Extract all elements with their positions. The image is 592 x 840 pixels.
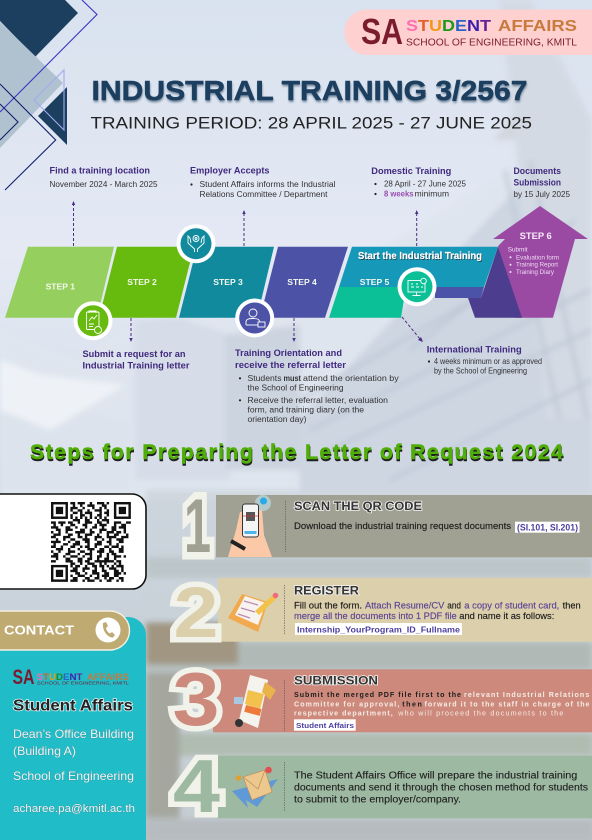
text: documents submission: [514, 166, 571, 199]
digit 2: 2: [174, 574, 218, 653]
section heading: Steps for Preparing the Letter of Request 2024: [30, 440, 563, 464]
text: domestic training: [371, 166, 467, 198]
icon: document and envelope: [234, 675, 276, 728]
step 1: [5, 247, 114, 318]
text: employer accepts: Employer Accepts: [190, 166, 270, 176]
card text: and name it as follows:: [459, 611, 554, 621]
card text: and: [447, 600, 461, 610]
card text: Fill out the form.: [294, 600, 362, 610]
arrow: dashed connectors: [72, 201, 423, 342]
text: domestic training: 28 April - 27 June 2025: [384, 180, 467, 188]
text: training orientation: [235, 348, 399, 424]
step 6 arrow: Training Report: [516, 262, 558, 269]
step 1: STEP 1: [46, 282, 75, 292]
small logo: SA: [12, 666, 34, 689]
panel: step 1 scan the QR code: [184, 484, 592, 569]
highlighted file name: Internship_YourProgram_ID_Fullname: [297, 624, 460, 634]
contact name: Student Affairs: [13, 698, 133, 715]
step 6 arrow: Evaluation form: [516, 254, 559, 261]
text: international training: International Training: [427, 345, 522, 356]
text: training orientation: receive the referral letter: [235, 360, 346, 371]
contact details: [13, 727, 135, 815]
text: find a training location: November 2024 - March 2025: [50, 180, 158, 189]
step 6 arrow: Training Diary: [516, 269, 555, 276]
text: submit a request: Industrial Training letter: [82, 360, 190, 372]
text: training orientation: attend the orientation by: [303, 374, 399, 383]
panel: step 2 register: [174, 574, 592, 653]
text: documents submission: by 15 July 2025: [514, 190, 571, 199]
panel: step 4 delivery: [173, 744, 592, 828]
text: submit a request: [82, 349, 190, 372]
section heading: Steps for Preparing the Letter of Request 2024: [30, 442, 564, 466]
text: international training: 4 weeks minimum or as approved: [434, 357, 542, 366]
panel: contact: [0, 611, 146, 840]
card heading: SUBMISSION: [294, 676, 378, 688]
icon: clipboard and pencil: [228, 593, 278, 632]
contact details: (Building A): [13, 744, 76, 758]
card text: Submit the merged PDF file first to the: [294, 691, 461, 699]
card text: Committee for approval,: [294, 700, 399, 708]
text: training orientation: Students: [248, 374, 282, 383]
logo pill: Student Affairs: AFFAIRS: [498, 18, 577, 35]
small logo: STUDENT: [36, 672, 83, 682]
card text: The Student Affairs Office will prepare the industrial training: [294, 771, 577, 782]
training period subtitle: TRAINING PERIOD: 28 APRIL 2025 - 27 JUNE 2025: [90, 114, 532, 132]
text: domestic training: minimum: [415, 190, 449, 198]
text: submit a request: Submit a request for an: [82, 349, 186, 360]
text: documents submission: Documents: [514, 166, 561, 177]
highlighted recipient: Student Affairs: [296, 721, 354, 730]
step 6 arrow: STEP 6: [520, 230, 552, 241]
text: domestic training: Domestic Training: [371, 166, 451, 177]
panel: step 3 submission: [172, 657, 592, 741]
card text: [294, 600, 581, 621]
contact pill with phone icon: [0, 611, 129, 650]
card text: merge all the documents into 1 PDF file: [294, 611, 457, 621]
icon: clipboard badge: [74, 301, 112, 340]
text: training orientation: orientation day): [248, 415, 307, 424]
step 6 arrow: [493, 206, 588, 318]
step 4: STEP 4: [287, 277, 317, 287]
card text: [294, 771, 588, 806]
step 5: [329, 247, 522, 318]
card text: forward it to the staff in charge of the: [424, 700, 590, 708]
decorative corner diamonds: [0, 0, 97, 190]
card text: who will proceed the documents to the: [397, 710, 563, 718]
text: training orientation: the School of Engineering: [248, 384, 344, 392]
card text: Attach Resume/CV: [365, 600, 445, 610]
card text: documents and send it through the chosen method for students: [294, 783, 588, 794]
title: INDUSTRIAL TRAINING 3/2567: [92, 75, 528, 106]
timeline of six steps: [5, 201, 588, 342]
digit 4: 4: [173, 744, 220, 828]
logo pill: Student Affairs: SA: [361, 11, 403, 52]
card text: Download the industrial training request documents: [294, 521, 511, 531]
step 2: [99, 247, 194, 318]
highlighted document codes: (SI.101, SI.201): [517, 522, 578, 532]
small logo: AFFAIRS: [87, 672, 129, 682]
icon: monitor badge: [398, 267, 436, 306]
text: training orientation: form, and training diary (on the: [248, 406, 364, 414]
step 3: STEP 3: [213, 277, 243, 287]
text: employer accepts: Student Affairs informs the Industrial: [200, 180, 336, 189]
text: international training: [427, 345, 542, 376]
card text: a copy of student card,: [464, 600, 559, 610]
step 4: [260, 247, 348, 318]
card text: respective department,: [294, 710, 393, 718]
text: training orientation: Receive the referral letter, evaluation: [248, 396, 388, 405]
card text: to submit to the employer/company.: [294, 795, 461, 806]
icon: envelope on paper plane: [232, 767, 278, 808]
text: find a training location: [50, 166, 158, 189]
step 3: [179, 247, 274, 318]
card text: then: [563, 600, 581, 610]
text: domestic training: 8 weeks: [384, 190, 414, 198]
step 5: Start the Industrial Training: [359, 252, 483, 263]
text: training orientation: Training Orientation and: [235, 348, 342, 359]
card text: [294, 691, 590, 718]
text: international training: by the School of Engineering: [434, 366, 527, 376]
step 5: STEP 5: [360, 277, 389, 287]
contact details: School of Engineering: [13, 769, 134, 783]
contact pill with phone icon: CONTACT: [4, 624, 74, 638]
text: employer accepts: [190, 166, 336, 199]
small logo: [12, 666, 129, 689]
card heading: REGISTER: [294, 586, 360, 598]
digit 1: 1: [184, 484, 211, 569]
contact details: Dean’s Office Building: [13, 727, 134, 741]
step 6 arrow: Submit: [508, 246, 528, 254]
QR code card: [0, 494, 146, 589]
text: documents submission: Submission: [514, 178, 561, 188]
text: training orientation: must: [284, 374, 301, 383]
logo pill: Student Affairs: STUDENT: [406, 18, 492, 35]
text: find a training location: Find a training location: [50, 166, 150, 176]
logo pill: Student Affairs: [344, 10, 592, 55]
digit 3: 3: [172, 657, 220, 741]
logo pill: Student Affairs: SCHOOL OF ENGINEERING, KMITL: [406, 38, 577, 48]
icon: hands with gear badge: [176, 224, 216, 263]
title: INDUSTRIAL TRAINING 3/2567: [92, 77, 528, 108]
contact details: acharee.pa@kmitl.ac.th: [13, 803, 135, 815]
card heading: SCAN THE QR CODE: [294, 501, 422, 513]
step 2: STEP 2: [127, 277, 157, 287]
step 5: Start the Industrial Training: [358, 251, 482, 262]
card text: relevant Industrial Relations: [464, 691, 589, 699]
icon: person with briefcase badge: [235, 298, 274, 338]
text: employer accepts: Relations Committee / Department: [200, 190, 328, 199]
card text: then: [402, 700, 422, 708]
icon: hand scanning phone: [228, 495, 272, 557]
small logo: SCHOOL OF ENGINEERING, KMITL: [37, 680, 129, 686]
